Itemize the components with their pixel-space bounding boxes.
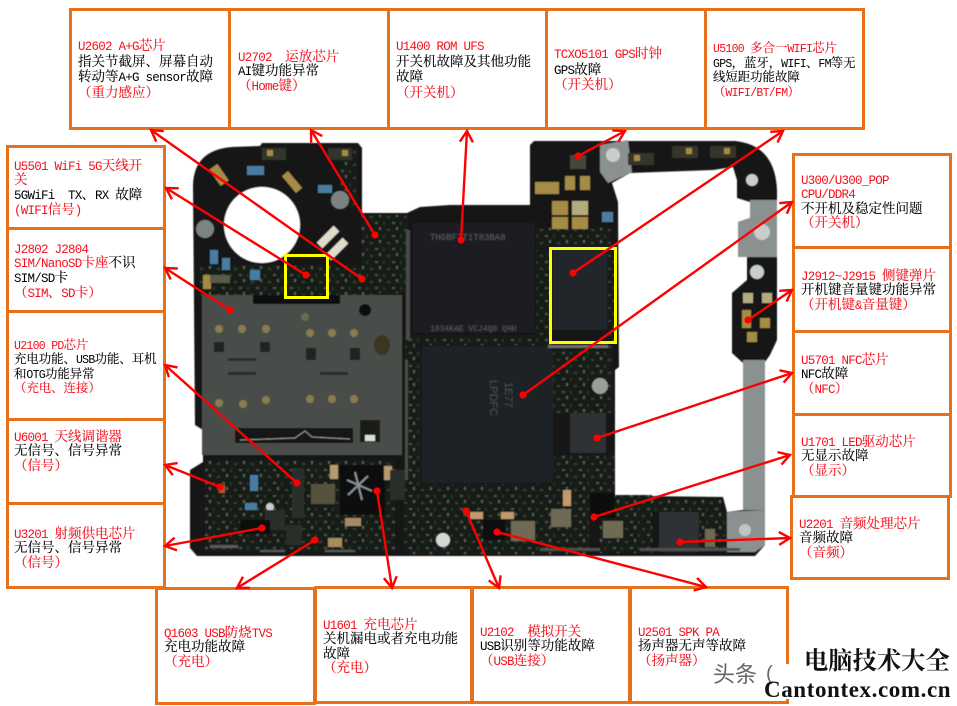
arrow: U2102 xyxy=(466,511,499,588)
arrow: U5701 xyxy=(597,373,792,438)
callout: U300 xyxy=(792,153,952,249)
arrow: U1400 xyxy=(461,131,467,240)
watermark: toutiao mark: 头条 xyxy=(713,657,757,689)
watermark: url: Cantontex.com.cn xyxy=(764,677,951,702)
callout: U2702 xyxy=(228,8,390,130)
board outline xyxy=(190,141,777,556)
callout: U5701 xyxy=(792,330,952,416)
metal shields xyxy=(600,140,777,552)
ROM chip: 1834KAE VCJ4Q0 QHH xyxy=(430,325,517,334)
callout: U2102 xyxy=(471,586,631,704)
callout: U1701: U1701 LED驱动芯片 无显示故障 （显示） xyxy=(801,430,916,479)
arrow: U3201 xyxy=(165,528,262,546)
callout: J2912 xyxy=(792,246,952,333)
arrow: U1601 xyxy=(377,491,392,588)
watermark: logo arc: ( xyxy=(766,663,773,685)
arrow: TCXO5101 xyxy=(578,131,625,156)
highlight: yellow box right xyxy=(550,248,616,342)
U1601 chip xyxy=(340,465,385,515)
callout: J2802 J2804: J2802 J2804 SIM/NanoSD卡座不识 SIM/SD卡 （SIM、SD卡） xyxy=(14,243,136,301)
dense component areas xyxy=(200,148,726,554)
callout: J2912: J2912~J2915 侧键弹片 开机键音量键功能异常 （开机键&音量键） xyxy=(801,264,936,313)
ROM chip: THGBF7T1T83BA8 xyxy=(430,233,506,243)
arrow: U2100 xyxy=(165,365,297,483)
callout: U6001 xyxy=(6,418,166,505)
arrow: U2501 xyxy=(497,532,706,587)
callout: U1400: U1400 ROM UFS 开关机故障及其他功能 故障 （开关机） xyxy=(396,40,531,101)
small components xyxy=(203,146,772,547)
arrow: U2602 xyxy=(151,130,362,279)
callout: U300: U300/U300_POP CPU/DDR4 不开机及稳定性问题 （开关机） xyxy=(801,174,922,231)
callout: U5100 xyxy=(704,8,865,130)
callout: U2602: U2602 A+G芯片 指关节截屏、屏幕自动 转动等A+G sensor故障 （重力感应） xyxy=(78,34,213,101)
callout: TCXO5101 xyxy=(545,8,707,130)
callout: U2501 xyxy=(629,586,789,704)
callout: U5501: U5501 WiFi 5G天线开 关 5GWiFi TX、RX 故障 (WIFI信号) xyxy=(14,154,142,218)
callout: U1601: U1601 充电芯片 关机漏电或者充电功能 故障 （充电） xyxy=(323,613,458,676)
callout: U2102: U2102 模拟开关 USB识别等功能故障 （USB连接） xyxy=(480,620,595,669)
callout: U2201: U2201 音频处理芯片 音频故障 （音频） xyxy=(799,512,921,561)
callout: U5701: U5701 NFC芯片 NFC故障 （NFC） xyxy=(801,348,889,397)
callout: U2201 xyxy=(790,495,950,580)
arrow: U6001 xyxy=(165,465,220,487)
watermark backing xyxy=(770,664,957,699)
arrow: U2702 xyxy=(311,130,375,235)
watermark: site name: 电脑技术大全 xyxy=(804,641,950,676)
arrows xyxy=(151,130,792,588)
arrow: U5501 xyxy=(166,188,306,275)
U2201 chip xyxy=(659,512,699,552)
watermark xyxy=(713,641,951,702)
round pads xyxy=(196,148,770,547)
callout: U1601 xyxy=(314,586,473,704)
ROM chip xyxy=(413,223,535,334)
camera hole xyxy=(224,187,300,263)
callout: U6001: U6001 天线调谐器 无信号、信号异常 （信号） xyxy=(14,425,122,474)
circuit board xyxy=(190,140,777,556)
callout: U2100 xyxy=(6,310,166,421)
callout: U2602 xyxy=(69,8,231,130)
callout: U2100: U2100 PD芯片 充电功能、USB功能、耳机 和OTG功能异常 （充电、连接） xyxy=(14,335,157,396)
callout: Q1603 xyxy=(155,587,316,705)
U5701 chip xyxy=(570,413,606,453)
arrow: U300 xyxy=(523,202,792,395)
callout: U2501: U2501 SPK PA 扬声器无声等故障 （扬声器） xyxy=(638,626,746,669)
callout: U2702: U2702 运放芯片 AI键功能异常 （Home键） xyxy=(238,45,339,94)
callout: TCXO5101: TCXO5101 GPS时钟 GPS故障 （开关机） xyxy=(554,42,662,93)
arrow: J2912 xyxy=(748,290,792,320)
callout: U1701 xyxy=(792,413,952,498)
callout: J2802 J2804 xyxy=(6,227,166,313)
arrow: U5100 xyxy=(573,131,783,273)
CPU DDR chip: 1E77 xyxy=(502,382,514,408)
arrow: J2802 xyxy=(165,268,230,310)
callout: U5501 xyxy=(6,145,166,230)
arrow: Q1603 xyxy=(237,540,315,588)
arrow: U1701 xyxy=(594,455,790,517)
callout: U3201: U3201 射频供电芯片 无信号、信号异常 （信号） xyxy=(14,522,136,571)
callout: U3201 xyxy=(6,502,166,589)
callout: U5100: U5100 多合一WIFI芯片 GPS，蓝牙，WIFI、FM等无 线短距功能故障 （WIFI/BT/FM） xyxy=(713,38,856,100)
arrow: U2201 xyxy=(680,538,790,542)
CPU DDR chip xyxy=(422,346,553,483)
U300 chip xyxy=(553,250,607,330)
highlight: yellow box left xyxy=(286,256,328,298)
SIM tray xyxy=(202,295,402,455)
callout: U1400 xyxy=(387,8,548,130)
CPU DDR chip: LPDFC xyxy=(487,380,499,416)
callout: Q1603: Q1603 USB防烧TVS 充电功能故障 （充电） xyxy=(164,621,272,670)
